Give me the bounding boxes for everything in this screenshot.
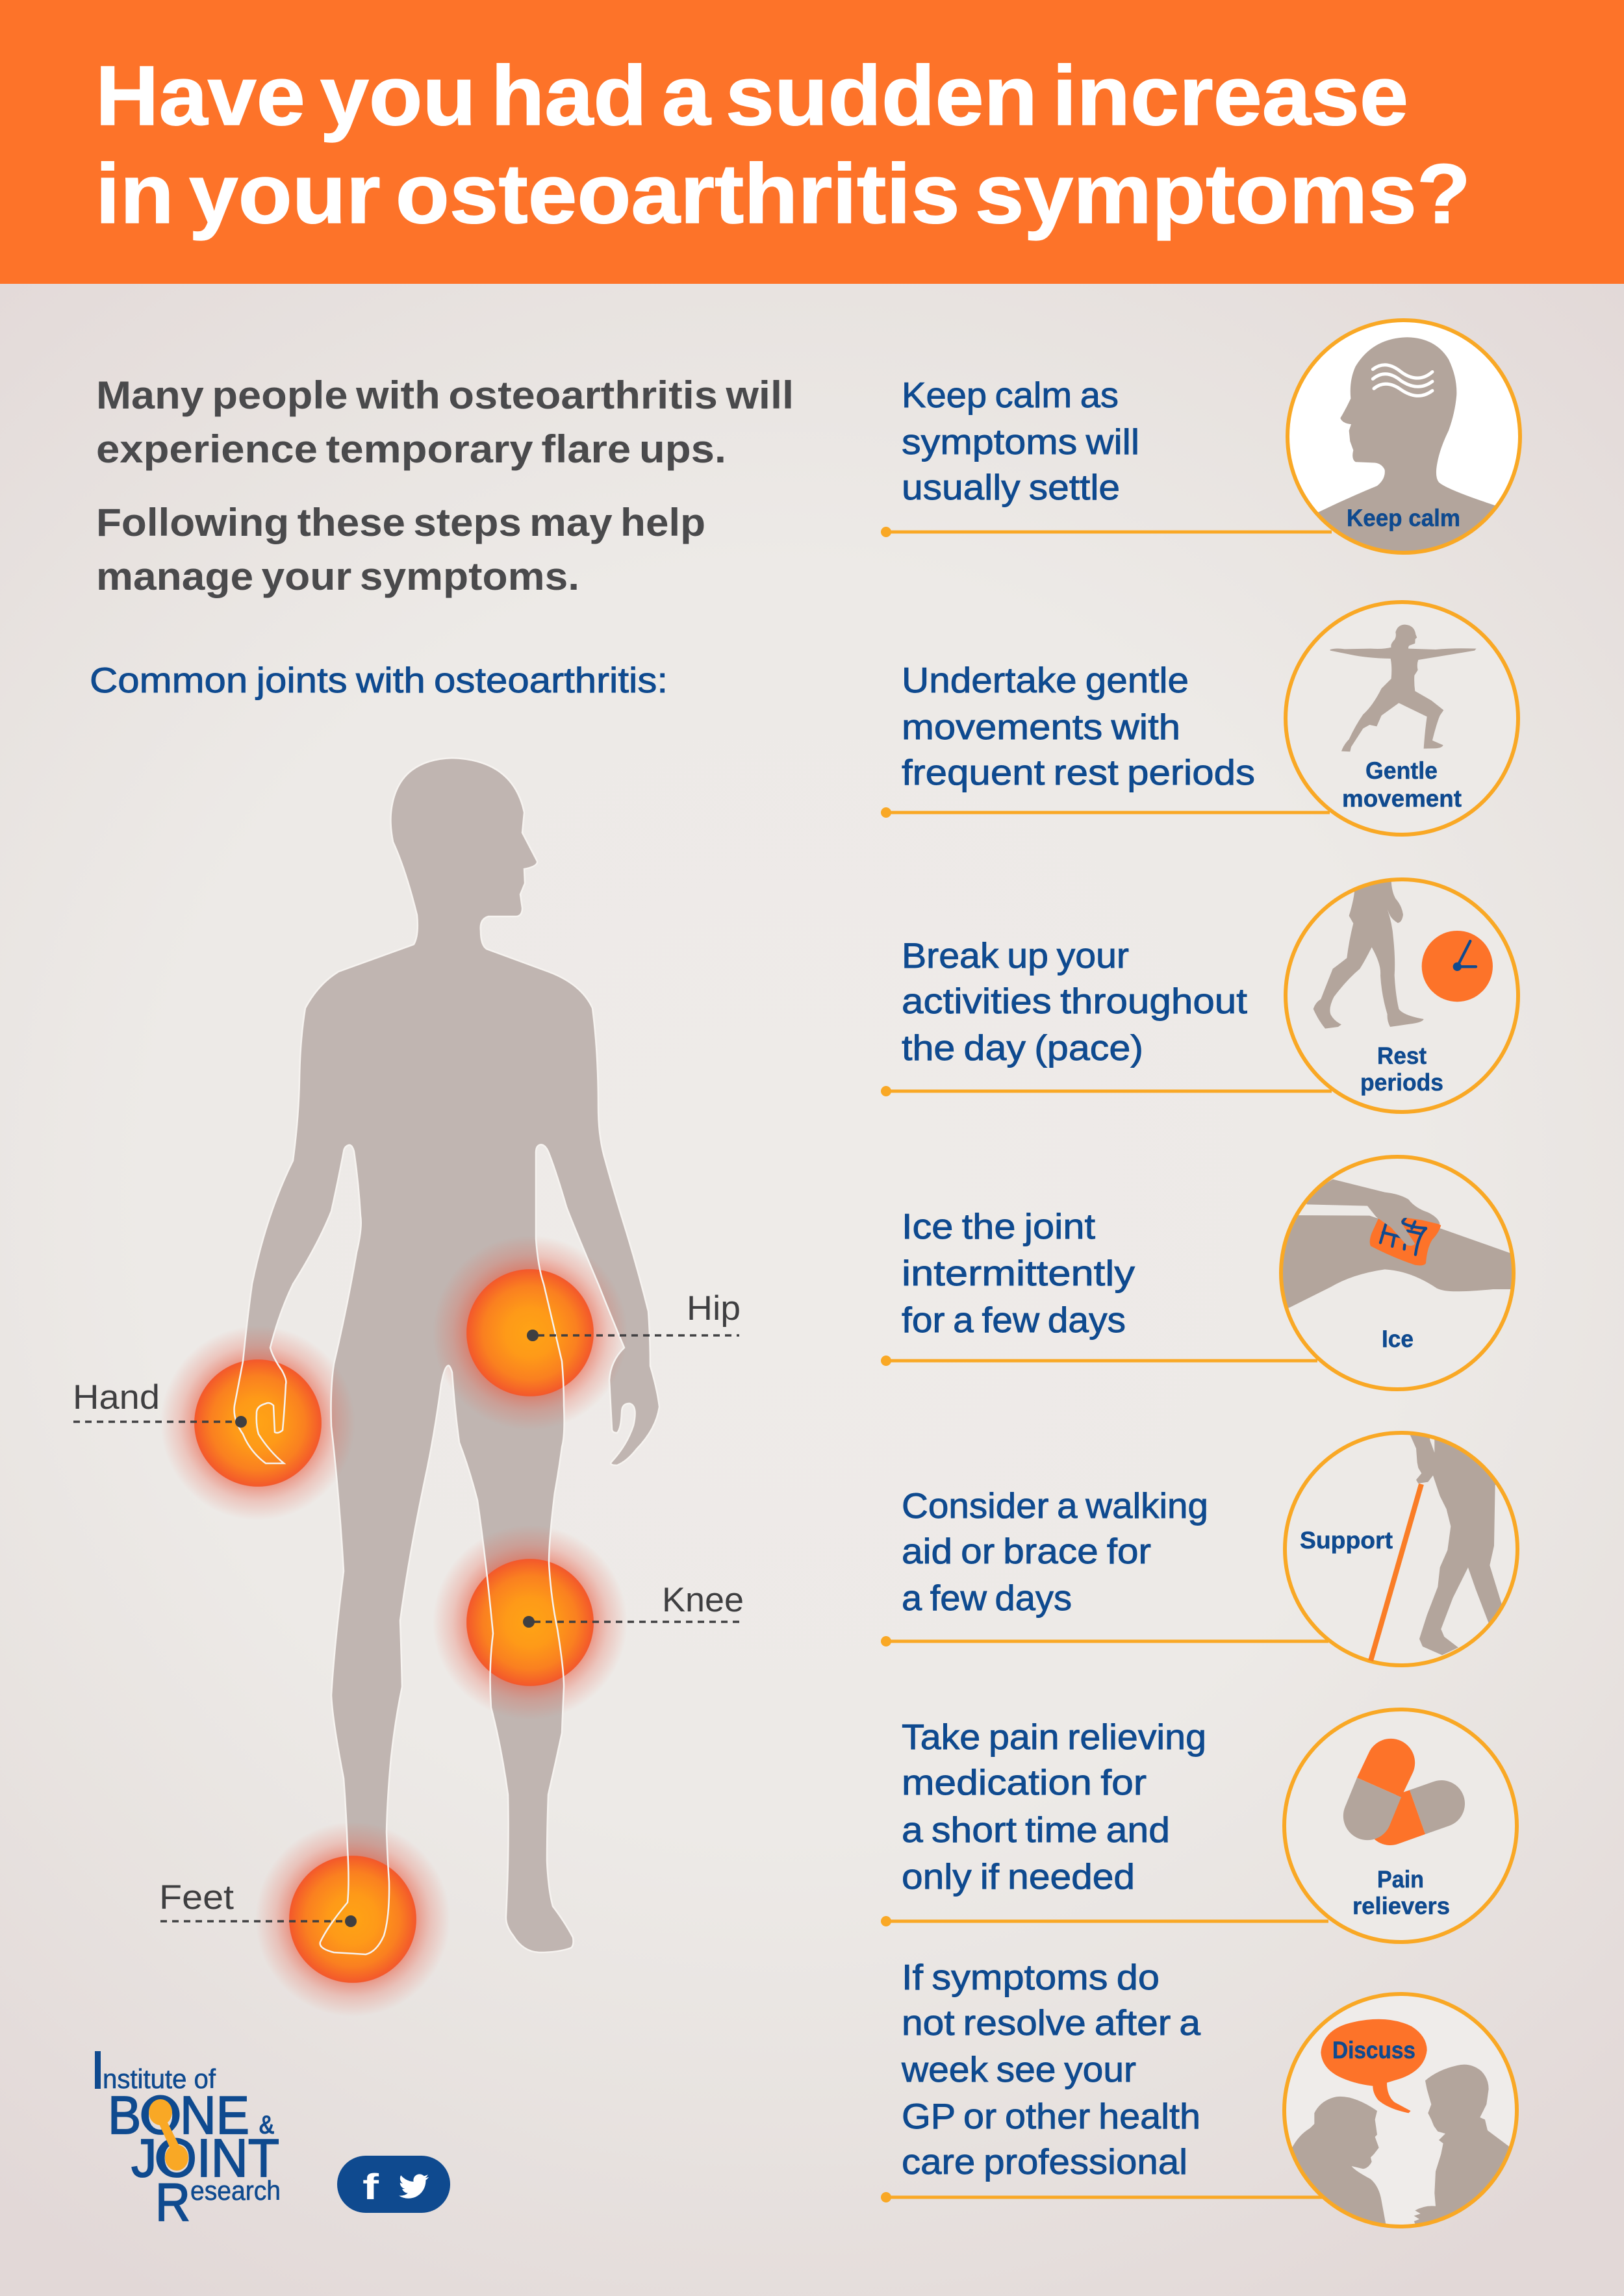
step 3 text: activities throughout	[902, 981, 1247, 1021]
logo: R	[155, 2172, 190, 2232]
icon: walker and clock: Rest	[1377, 1042, 1427, 1069]
icon: yoga figure	[1286, 602, 1518, 835]
icon: person with cane	[1285, 1429, 1517, 1665]
label: knee	[523, 1581, 744, 1628]
step 5: walking aid	[881, 1429, 1517, 1665]
title: in your osteoarthritis symptoms?	[95, 146, 1471, 241]
step 5 text	[902, 1485, 1208, 1618]
icon: yoga figure: Gentle	[1365, 757, 1438, 784]
step 2 text: movements with	[902, 707, 1180, 747]
step 6 text	[902, 1717, 1206, 1897]
intro text: Following these steps may help	[96, 501, 705, 544]
step 5 leader	[881, 1636, 1328, 1646]
step 2 leader	[881, 807, 1330, 818]
step 1 text: symptoms will	[902, 422, 1139, 462]
step 1: keep calm	[881, 320, 1522, 555]
step 1 text: usually settle	[902, 467, 1120, 507]
step 6 text: only if needed	[902, 1856, 1135, 1897]
label: hip	[527, 1289, 741, 1341]
body silhouette	[235, 758, 659, 1954]
step 7: see your GP	[881, 1957, 1522, 2230]
icon: head	[1288, 320, 1522, 555]
speech bubble: Discuss	[1332, 2037, 1415, 2063]
header banner	[0, 0, 1624, 284]
logo: esearch	[190, 2175, 281, 2206]
intro text: manage your symptoms.	[96, 555, 579, 598]
icon: walker and clock: periods	[1360, 1069, 1443, 1096]
step 5 text: a few days	[902, 1578, 1072, 1618]
icon: knee with ice pack: Ice	[1382, 1326, 1414, 1352]
intro text	[96, 373, 794, 598]
step 4 text: intermittently	[902, 1253, 1136, 1293]
icon: discussion	[1280, 1994, 1522, 2230]
step 4 text	[902, 1206, 1136, 1340]
step 2 text: Undertake gentle	[902, 660, 1189, 700]
step 3 text	[902, 935, 1247, 1068]
icon: pills	[1284, 1709, 1517, 1942]
step 4: ice	[881, 1157, 1515, 1389]
step 2 text	[902, 660, 1255, 792]
step 7 text: week see your	[901, 2049, 1136, 2089]
icon: pills: Pain	[1377, 1866, 1424, 1893]
step 4 text: Ice the joint	[902, 1206, 1095, 1246]
step 1 text	[902, 375, 1139, 507]
step 6 text: a short time and	[902, 1810, 1170, 1850]
label: feet: Feet	[159, 1878, 234, 1917]
step 3: pacing	[881, 878, 1518, 1112]
title	[95, 48, 1471, 241]
step 6 text: medication for	[902, 1762, 1147, 1802]
label: hand: Hand	[73, 1378, 160, 1417]
step 7 text	[901, 1957, 1200, 2182]
step 3 leader	[881, 1086, 1332, 1096]
icon: twitter	[399, 2174, 429, 2199]
logo: BONE	[108, 2085, 249, 2145]
step 7 text: If symptoms do	[902, 1957, 1160, 1997]
intro text: experience temporary flare ups.	[96, 427, 726, 471]
icon: walker and clock	[1286, 878, 1518, 1112]
joints heading: Common joints with osteoarthritis:	[90, 660, 668, 700]
step 7 leader	[881, 2192, 1323, 2202]
hip glow	[433, 1235, 628, 1430]
step 6 text: Take pain relieving	[902, 1717, 1206, 1757]
step 2: gentle movement	[881, 602, 1518, 835]
step 6: pain relievers	[881, 1709, 1517, 1942]
step 5 text: Consider a walking	[902, 1485, 1208, 1526]
knee glow	[433, 1525, 628, 1720]
step 5 text: aid or brace for	[902, 1531, 1151, 1571]
logo bone mark	[149, 2099, 188, 2171]
step 2 text: frequent rest periods	[902, 752, 1255, 792]
intro text: Many people with osteoarthritis will	[96, 373, 794, 417]
icon: knee with ice pack	[1276, 1157, 1515, 1389]
feet glow	[255, 1822, 450, 2017]
logo	[95, 2051, 281, 2232]
logo: nstitute of	[103, 2063, 216, 2094]
body outline	[235, 758, 659, 1954]
label: feet	[159, 1878, 357, 1927]
step 6 leader	[881, 1916, 1328, 1926]
label: hip: Hip	[687, 1289, 741, 1328]
icon: yoga figure: movement	[1342, 785, 1462, 812]
step 7 text: not resolve after a	[902, 2002, 1200, 2043]
step 1 leader	[881, 527, 1332, 537]
step 4 leader	[881, 1356, 1317, 1366]
logo: JOINT	[131, 2128, 279, 2188]
icon: pills: relievers	[1352, 1893, 1450, 1919]
social badge	[337, 2156, 450, 2213]
label: knee: Knee	[662, 1581, 744, 1619]
label: hand	[73, 1378, 247, 1428]
step 7 text: care professional	[902, 2141, 1187, 2182]
speech bubble	[1321, 2019, 1427, 2113]
clock	[1422, 931, 1493, 1002]
step 4 text: for a few days	[902, 1300, 1126, 1340]
step 3 text: the day (pace)	[902, 1028, 1143, 1068]
icon: head: Keep calm	[1347, 505, 1460, 531]
step 7 text: GP or other health	[902, 2096, 1200, 2136]
step 3 text: Break up your	[902, 935, 1129, 976]
title: Have you had a sudden increase	[95, 48, 1408, 143]
icon: facebook: f	[362, 2166, 379, 2207]
logo rings	[144, 2097, 192, 2175]
step 1 text: Keep calm as	[902, 375, 1119, 415]
icon: person with cane: Support	[1300, 1527, 1393, 1554]
logo: &	[259, 2110, 275, 2139]
hand glow	[160, 1326, 355, 1520]
